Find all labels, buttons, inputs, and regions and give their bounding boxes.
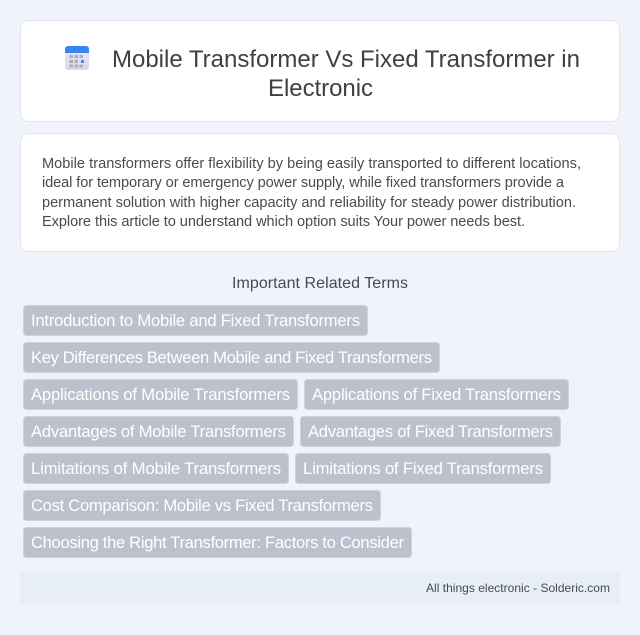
text block: summary paragraph: permanent solution with higher capacity and reliability for steady power distribution. [42, 195, 576, 211]
tag: applications of mobile [24, 380, 298, 410]
tag: key differences: Key Differences Between Mobile and Fixed Transformers [31, 348, 432, 367]
tag: choosing the right transformer [24, 528, 412, 558]
tag: limitations of mobile [24, 454, 288, 484]
panel: summary [20, 134, 620, 252]
text block: summary paragraph [42, 156, 581, 230]
tag: limitations of fixed: Limitations of Fixed Transformers [303, 459, 543, 478]
tag: key differences [24, 342, 440, 372]
tag: advantages of mobile [24, 416, 294, 446]
tag: advantages of mobile: Advantages of Mobile Transformers [31, 422, 286, 441]
tag: limitations of mobile: Limitations of Mobile Transformers [31, 459, 281, 478]
title [112, 46, 580, 102]
tag: choosing the right transformer: Choosing the Right Transformer: Factors to Consider [31, 533, 404, 552]
icon: calendar [65, 46, 89, 70]
tag: applications of fixed [304, 380, 568, 410]
panel: term tags [24, 306, 568, 558]
title: Mobile Transformer Vs Fixed Transformer in [112, 46, 580, 73]
text block: summary paragraph: Mobile transformers offer flexibility by being easily transported to different locations, [42, 156, 581, 172]
tag: introduction: Introduction to Mobile and Fixed Transformers [31, 311, 360, 330]
tag: cost comparison [24, 490, 380, 520]
tag: limitations of fixed [296, 454, 550, 484]
text block: summary paragraph: ideal for temporary or emergency power supply, while fixed transformers provide a [42, 175, 565, 191]
title: Electronic [268, 75, 373, 102]
tag: advantages of fixed: Advantages of Fixed Transformers [308, 422, 553, 441]
tag: introduction [24, 306, 368, 336]
tag: advantages of fixed [300, 416, 560, 446]
tag: applications of mobile: Applications of Mobile Transformers [31, 385, 290, 404]
footer [20, 571, 620, 605]
text block: summary paragraph: Explore this article to understand which option suits Your power needs best. [42, 214, 525, 230]
tag: cost comparison: Cost Comparison: Mobile vs Fixed Transformers [31, 496, 373, 515]
tag: applications of fixed: Applications of Fixed Transformers [312, 385, 561, 404]
footer: All things electronic - Solderic.com [426, 581, 610, 595]
heading: related terms: Important Related Terms [232, 275, 408, 292]
panel: header [20, 20, 620, 122]
